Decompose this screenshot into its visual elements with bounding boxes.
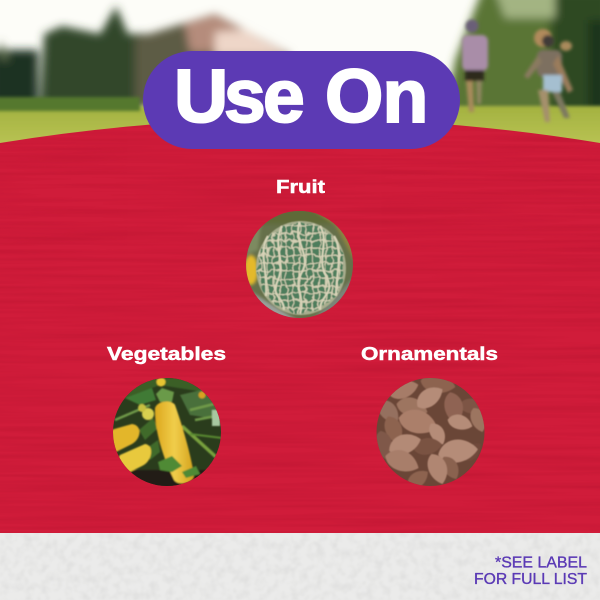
heading: Vegetables: Vegetables (107, 343, 226, 364)
child right (524, 29, 573, 122)
note: see label: FOR FULL LIST (474, 571, 588, 588)
note: see label: *SEE LABEL (495, 554, 587, 572)
photo: bronze leaves (376, 378, 484, 486)
note: see label (474, 554, 588, 588)
red wood panel (0, 100, 600, 533)
heading: Ornamentals: Ornamentals (361, 343, 498, 364)
footer textured band (0, 533, 600, 600)
photo: yellow squash (111, 377, 222, 488)
child left (462, 20, 488, 112)
heading: Fruit: Fruit (276, 176, 325, 197)
background photo: backyard (0, 0, 600, 150)
title text: Use On (174, 54, 428, 138)
photo: melon (246, 211, 353, 318)
title pill (143, 51, 460, 149)
